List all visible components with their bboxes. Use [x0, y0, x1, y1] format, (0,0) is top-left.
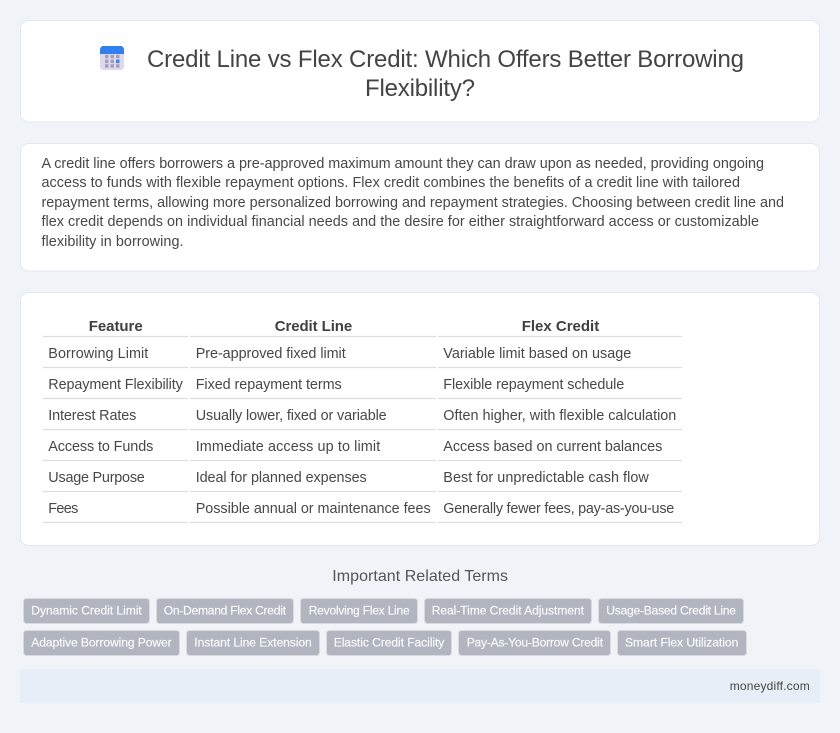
- row: repayment flexibility: [48, 377, 624, 393]
- row: access to funds: Immediate access up to limit: [196, 439, 380, 455]
- row: interest rates: [48, 408, 676, 424]
- text block: summary paragraph: flexibility in borrowing.: [42, 234, 184, 250]
- row: borrowing limit: Borrowing Limit: [48, 346, 148, 362]
- tag list: related terms: [24, 598, 746, 656]
- row: interest rates: Often higher, with flexible calculation: [443, 408, 676, 424]
- text block: summary paragraph: [42, 156, 784, 250]
- tag: Usage-Based Credit Line: [606, 604, 736, 618]
- row: interest rates: Interest Rates: [48, 408, 136, 424]
- tag: Pay-As-You-Borrow Credit: [467, 636, 604, 650]
- row: fees: Possible annual or maintenance fees: [196, 501, 431, 517]
- tag: [598, 598, 744, 624]
- row: repayment flexibility: Fixed repayment terms: [196, 377, 342, 393]
- row: repayment flexibility: Flexible repayment schedule: [443, 377, 624, 393]
- title: Flexibility?: [365, 75, 475, 102]
- tag: Real-Time Credit Adjustment: [432, 604, 585, 618]
- row: usage purpose: Ideal for planned expenses: [196, 470, 367, 486]
- row: interest rates: Usually lower, fixed or variable: [196, 408, 387, 424]
- tag: Revolving Flex Line: [309, 604, 410, 618]
- table header: Credit Line: [275, 318, 352, 335]
- tag: [424, 598, 592, 624]
- row: repayment flexibility: Repayment Flexibility: [48, 377, 184, 393]
- title: [147, 46, 744, 102]
- table header: Feature: [89, 318, 143, 335]
- row: fees: Generally fewer fees, pay-as-you-use: [443, 501, 674, 517]
- row: fees: [48, 501, 674, 517]
- tag: [618, 630, 746, 656]
- tag: [326, 630, 452, 656]
- title: Credit Line vs Flex Credit: Which Offers Better Borrowing: [147, 46, 744, 73]
- tag: Dynamic Credit Limit: [31, 604, 142, 618]
- panel: comparison table: [20, 292, 820, 546]
- row: access to funds: Access to Funds: [48, 439, 153, 455]
- tag: On-Demand Flex Credit: [164, 604, 287, 618]
- panel: title card: [20, 20, 820, 122]
- row: usage purpose: Best for unpredictable cash flow: [443, 470, 649, 486]
- footer: [20, 669, 820, 703]
- tag: Smart Flex Utilization: [625, 636, 738, 650]
- text block: summary paragraph: repayment terms, allowing more personalized borrowing and repayment strategies. Choosing between credit line and: [42, 195, 784, 211]
- text block: summary paragraph: access to funds with flexible repayment options. Flex credit combines the benefits of a credit line with tailored: [42, 175, 740, 191]
- heading: important related terms: Important Related Terms: [332, 568, 508, 585]
- tag: [24, 598, 150, 624]
- panel: summary: [20, 144, 820, 271]
- tag: [186, 630, 320, 656]
- tag: [300, 598, 418, 624]
- tag: [156, 598, 294, 624]
- row: access to funds: Access based on current balances: [443, 439, 662, 455]
- row: access to funds: [48, 439, 662, 455]
- tag: Elastic Credit Facility: [334, 636, 445, 650]
- row: borrowing limit: [48, 346, 631, 362]
- row: fees: Fees: [48, 501, 78, 517]
- row: borrowing limit: Variable limit based on usage: [443, 346, 631, 362]
- icon: calendar: [100, 46, 124, 70]
- footer: moneydiff.com: [730, 679, 810, 693]
- tag: Instant Line Extension: [194, 636, 312, 650]
- row: usage purpose: Usage Purpose: [48, 470, 145, 486]
- tag: Adaptive Borrowing Power: [31, 636, 172, 650]
- row: usage purpose: [48, 470, 649, 486]
- table header: [89, 318, 599, 335]
- row: borrowing limit: Pre-approved fixed limit: [196, 346, 346, 362]
- text block: summary paragraph: flex credit depends on individual financial needs and the desire for either straightforward access or customizable: [42, 214, 759, 230]
- text block: summary paragraph: A credit line offers borrowers a pre-approved maximum amount they can draw upon as needed, providing ongoing: [42, 156, 764, 172]
- tag: [458, 630, 610, 656]
- table header: Flex Credit: [522, 318, 599, 335]
- tag: [24, 630, 180, 656]
